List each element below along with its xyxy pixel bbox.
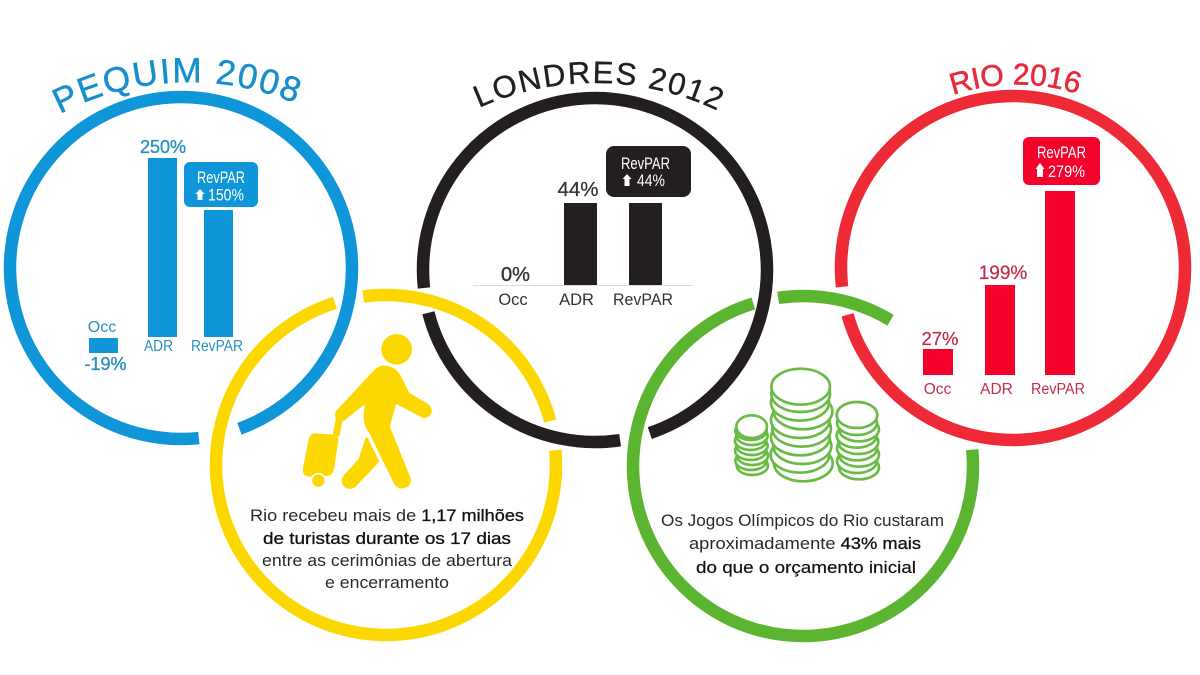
bar chart: Londres: 0%	[501, 264, 530, 286]
bar chart: Londres: RevPAR	[613, 291, 673, 309]
text: tourists: Rio recebeu mais de 1,17 milhões	[250, 507, 524, 525]
callout: RevPAR 150%: RevPAR	[197, 168, 245, 187]
bar chart: Pequim: Occ	[88, 319, 116, 336]
panel: Pequim 2008	[4, 58, 358, 446]
callout: RevPAR 44%	[606, 146, 691, 197]
callout: RevPAR 44%: 44%	[637, 172, 665, 190]
bar chart: Rio: ADR	[980, 381, 1013, 398]
bar chart: Pequim: -19%	[84, 354, 127, 374]
icon: coin stacks	[735, 369, 879, 481]
title: Rio 2016: RIO 2016	[949, 63, 1081, 94]
text: cost: aproximadamente 43% mais	[689, 535, 921, 553]
text: cost: Os Jogos Olímpicos do Rio custaram	[661, 512, 944, 530]
panel: cost	[610, 273, 996, 659]
title: Londres 2012: LONDRES 2012	[472, 61, 723, 110]
bar chart: Rio: 199%	[979, 263, 1027, 284]
text: cost: do que o orçamento inicial	[696, 559, 916, 577]
panel: Londres 2012	[416, 61, 774, 448]
bar chart: Londres	[473, 178, 693, 309]
bar chart: Pequim: 250%	[140, 137, 186, 157]
text: tourists: e encerramento	[325, 574, 449, 592]
icon: traveller with suitcase	[303, 334, 430, 488]
red ring	[823, 78, 1200, 458]
panel: tourists	[195, 274, 577, 656]
text: tourists	[250, 507, 524, 592]
bar chart: Londres: Occ	[498, 291, 528, 309]
blue ring	[0, 80, 369, 456]
callout: RevPAR 44%: RevPAR	[621, 154, 670, 173]
callout: RevPAR 150%: 150%	[208, 186, 244, 204]
callout: RevPAR 279%: RevPAR	[1037, 143, 1086, 162]
text: tourists: de turistas durante os 17 dias	[263, 530, 511, 548]
bar chart: Rio: Occ	[924, 381, 952, 398]
callout: RevPAR 279%: 279%	[1048, 162, 1085, 181]
bar chart: Rio: 27%	[921, 328, 959, 349]
bar chart: Londres: 44%	[557, 178, 599, 201]
yellow ring	[195, 274, 577, 656]
bar chart: Londres: ADR	[559, 291, 594, 309]
green ring	[610, 273, 996, 659]
title: Pequim 2008: PEQUIM 2008	[52, 58, 300, 113]
panel: Rio 2016	[834, 63, 1192, 446]
text: cost	[661, 512, 944, 577]
callout: RevPAR 279%	[1023, 137, 1100, 185]
bar chart: Rio: RevPAR	[1031, 381, 1085, 398]
bar chart: Pequim: RevPAR	[191, 338, 243, 355]
black ring	[400, 75, 790, 465]
callout: RevPAR 150%	[184, 162, 258, 207]
bar chart: Rio	[921, 191, 1085, 398]
text: tourists: entre as cerimônias de abertura	[262, 552, 513, 570]
bar chart: Pequim	[84, 137, 243, 374]
bar chart: Pequim: ADR	[144, 338, 173, 355]
